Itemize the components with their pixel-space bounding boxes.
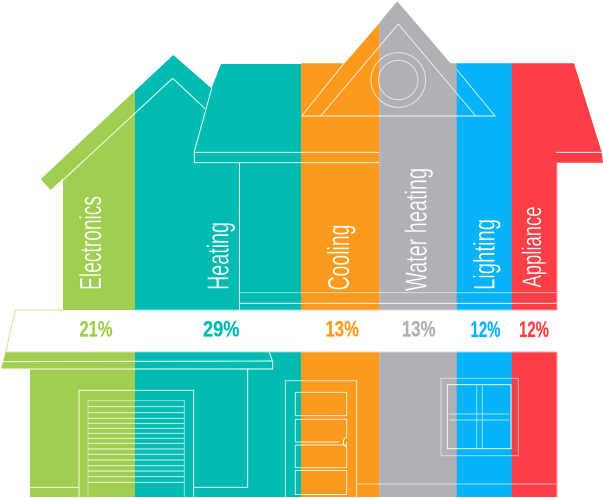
value: cooling 13%: 13%	[326, 317, 359, 342]
band edge: gray	[379, 310, 457, 352]
window mullions	[449, 385, 509, 448]
attic round window	[371, 53, 426, 107]
upper floor siding lines	[240, 292, 556, 294]
label: heating: Heating	[200, 222, 236, 290]
foundation line	[358, 483, 556, 485]
band edge: blue	[457, 310, 512, 352]
label: lighting: Lighting	[468, 219, 502, 290]
band edge: green	[6, 310, 135, 352]
window outer frame	[441, 378, 518, 456]
garage door	[79, 390, 194, 497]
main roof and eave outline	[194, 88, 602, 310]
porch eave outline	[1, 352, 273, 369]
label: electronics: Electronics	[73, 196, 108, 290]
percentage values	[80, 317, 549, 342]
attic triangle outer	[302, 23, 495, 116]
garage slats	[88, 407, 184, 482]
white band edges	[6, 163, 557, 497]
value: electronics 21%: 21%	[80, 317, 112, 342]
small gable roof outline	[63, 78, 205, 180]
value: lighting 12%: 12%	[470, 317, 500, 342]
band edge: teal	[135, 310, 301, 352]
value: heating 29%: 29%	[203, 317, 240, 342]
stripe: cooling	[301, 23, 379, 497]
garage inner frame	[88, 401, 184, 497]
band edge: orange	[301, 310, 379, 352]
rotated category labels	[73, 168, 547, 291]
stripe: appliance	[512, 63, 603, 497]
stripe: water heating	[379, 1, 457, 497]
value: water heating 13%: 13%	[402, 317, 436, 342]
outline drawing: upper floor and roofs	[63, 23, 602, 310]
garage frame	[79, 390, 194, 497]
label: cooling: Cooling	[321, 224, 356, 290]
attic triangle inner	[321, 24, 476, 116]
band edge: red	[512, 163, 557, 497]
stripe: heating	[135, 55, 302, 497]
stripe: lighting	[457, 63, 512, 497]
window	[441, 378, 518, 456]
label: appliance: Appliance	[517, 206, 547, 288]
outline drawing: lower floor	[1, 352, 556, 497]
front door	[285, 381, 357, 497]
door frame	[285, 381, 357, 497]
stripe: electronics	[1, 91, 135, 497]
value: appliance 12%: 12%	[519, 317, 549, 342]
lower wall outline	[30, 369, 248, 487]
window inner frame	[447, 385, 511, 449]
door knob	[343, 438, 347, 447]
door panels	[295, 392, 347, 494]
label: water heating: Water heating	[398, 168, 434, 291]
